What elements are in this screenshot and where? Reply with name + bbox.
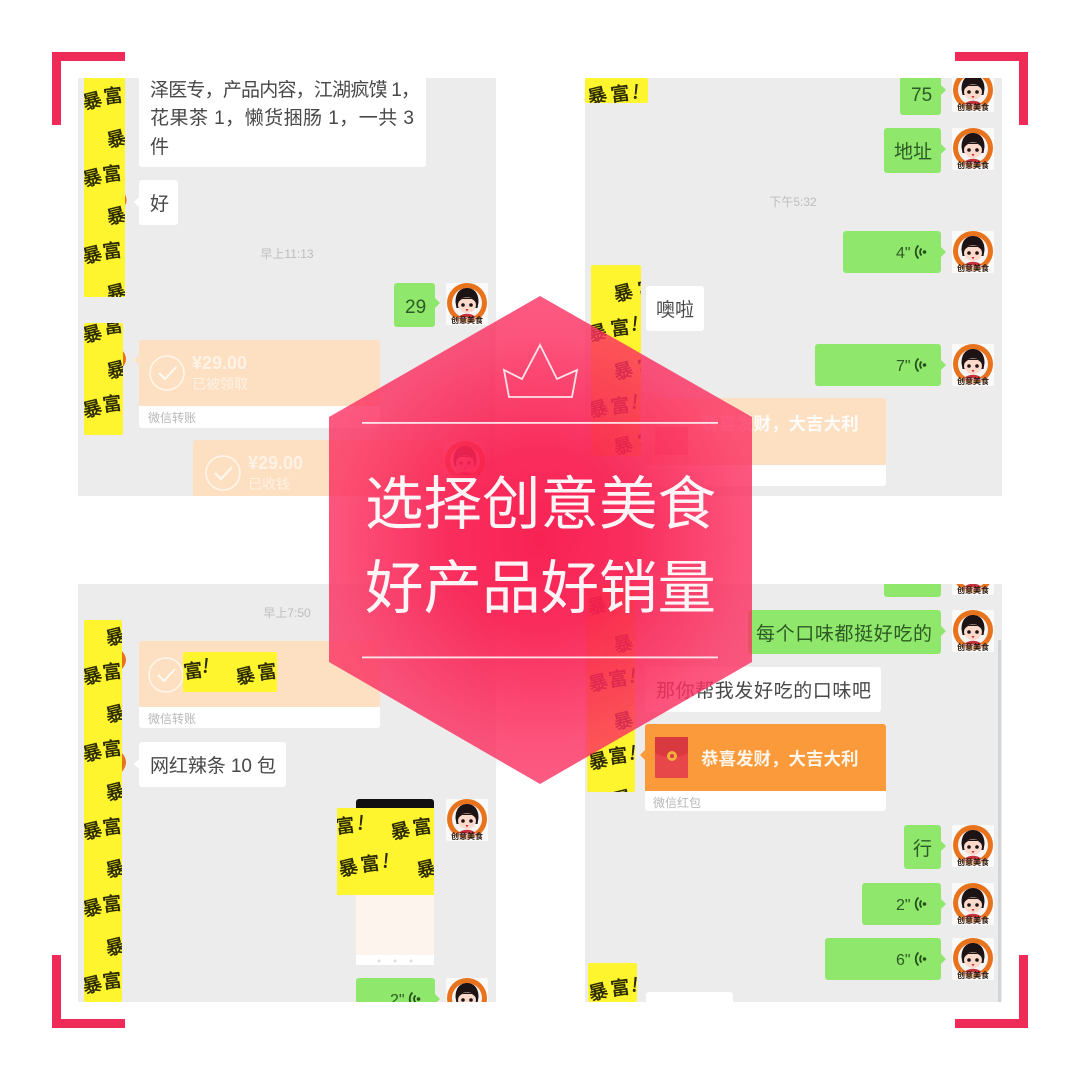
watermark strip: 富 [101,235,123,265]
bubble: order details: 泽医专，产品内容，江湖疯馍 1， [150,79,420,101]
watermark strip [585,584,637,813]
watermark patch on screenshot: 富 [411,811,433,841]
watermark strip: 暴 [103,853,127,883]
watermark strip: 暴 [611,705,635,735]
scrollbar [998,640,1001,1002]
watermark strip: 富 [636,351,658,381]
voice bubble: 4 seconds: 4" [896,245,911,262]
transfer card: collected [193,440,329,496]
voice bubble: 2 seconds [862,883,946,925]
avatar: 创意美食 [957,102,989,113]
bubble: ok: 噢啦 [656,299,694,321]
panel: chat screenshot bottom left [78,584,496,1020]
avatar [446,978,488,1002]
avatar: 创意美食 [957,857,989,868]
bubble: 75: 75 [911,85,932,106]
bubble cut off at bottom [646,992,733,1022]
bubble cut off at top [884,560,941,597]
watermark strip: 暴 [585,317,609,347]
watermark strip: 暴 [80,892,104,922]
watermark patch on transfer card: 富 [256,656,278,686]
avatar [445,441,485,475]
watermark strip: 富 [101,888,123,918]
central hexagon badge [329,296,752,784]
watermark strip: 暴 [80,162,104,192]
watermark strip: 富 [102,310,124,340]
watermark strip: 暴 [586,393,610,423]
bubble: reply: 好 [150,193,169,215]
headline: 选择创意美食 [365,472,716,537]
bubble: spicy strips order: 网红辣条 10 包 [150,755,276,777]
corner bracket: top right [955,56,1024,125]
watermark strip: 暴 [585,80,609,110]
avatar: 创意美食 [957,642,989,653]
watermark strip: 富 [101,158,123,188]
watermark patch on screenshot: ! [357,808,365,836]
voice bubble: 2 seconds: 2" [390,992,405,1009]
transfer card: received: 微信转账 [148,410,196,425]
avatar: 创意美食 [957,915,989,926]
avatar: 创意美食 [451,831,483,842]
avatar: 创意美食 [957,160,989,171]
avatar [446,799,488,842]
red packet card: 恭喜发财，大吉大利 [701,749,858,769]
bubble: amount 29: 29 [405,297,426,318]
corner bracket: bottom left [56,955,125,1024]
watermark strip [591,265,641,456]
avatar: 创意美食 [957,970,989,981]
watermark strip [585,78,648,103]
icon: crown [504,345,577,397]
red packet card [640,724,886,811]
watermark strip [84,323,123,435]
watermark patch on transfer card: 富 [182,655,204,685]
watermark strip: 暴 [586,745,610,775]
voice bubble: 2 seconds: 2" [896,897,911,914]
corner bracket: top left [56,56,125,125]
screenshot seam under badge [491,330,493,496]
watermark strip: 暴 [104,354,128,384]
bubble: 75 [900,78,946,115]
avatar: 创意美食 [451,315,483,326]
bubble: ok [646,286,704,331]
bubble: okay: 行 [913,838,932,860]
avatar [952,883,994,926]
voice bubble: 2 seconds [356,978,440,1002]
red packet card: 微信红包 [653,795,701,810]
watermark patch on screenshot: 暴 [414,853,438,883]
watermark strip: 富 [609,390,631,420]
transfer card: received: ¥29.00 [192,353,247,373]
avatar [952,231,994,274]
watermark patch on screenshot: 暴 [336,852,360,882]
voice bubble: 6 seconds [825,938,946,980]
transfer card: received: 已被领取 [192,376,248,392]
avatar: 创意美食 [957,263,989,274]
avatar [952,344,994,387]
bubble: order details: 件 [150,136,169,158]
watermark strip: 暴 [80,815,104,845]
watermark strip: ! [629,738,637,766]
headline [365,472,716,621]
watermark strip: 暴 [586,976,610,1006]
watermark strip: 富 [101,965,123,995]
watermark strip: 暴 [80,318,104,348]
watermark patch on screenshot: 富 [334,810,356,840]
bubble: order details [139,78,426,167]
bubble: amount 29 [394,283,440,327]
watermark strip: 富 [101,733,123,763]
avatar: 创意美食 [957,376,989,387]
panel: chat screenshot bottom right [585,553,1002,1022]
watermark patch on transfer card: 暴 [233,660,257,690]
bubble: tasty flavours [748,610,946,654]
watermark strip: 富 [636,273,658,303]
watermark strip: 富 [609,312,631,342]
transfer card: received [134,340,380,428]
watermark strip: 暴 [80,239,104,269]
transfer card: collected: ¥29.00 [248,453,303,473]
bubble: send tasty flavours: 那你帮我发好吃的口味吧 [656,680,871,702]
watermark strip: ! [631,970,639,998]
red packet card: opened [645,398,886,486]
watermark strip: 暴 [104,277,128,307]
phone screenshot message [356,799,434,965]
watermark strip: 暴 [80,393,104,423]
watermark strip: 暴 [104,123,128,153]
watermark strip: ! [629,661,637,689]
avatar: 创意美食 [957,585,989,596]
watermark strip: ! [632,77,640,105]
watermark strip [84,78,125,297]
watermark patch on screenshot [334,808,438,895]
watermark strip: 暴 [80,737,104,767]
watermark strip [84,620,122,1002]
watermark patch on transfer card: ! [202,651,210,679]
bubble: address: 地址 [894,141,932,163]
voice bubble: 4 seconds [843,231,946,273]
avatar edge slivers [123,194,126,367]
bubble: okay [904,825,946,869]
watermark strip: 暴 [103,621,127,651]
timestamp: 早上7:50 [263,606,311,620]
bubble: reply [134,180,178,225]
transfer card: collected: 已收钱 [248,476,290,492]
watermark strip: 暴 [80,660,104,690]
avatar [446,283,488,326]
voice bubble: 7 seconds [815,344,946,386]
watermark patch on transfer card [182,651,278,692]
bubble: order details: 花果茶 1，懒货捆肠 1，一共 3 [150,107,414,129]
watermark strip: 暴 [610,783,634,813]
watermark strip: 暴 [103,931,127,961]
divider top [362,422,718,424]
watermark strip: 富 [101,811,123,841]
red packet card: opened: 恭喜发财，大吉大利 [701,414,858,434]
watermark strip: 暴 [80,85,104,115]
watermark strip: 富 [609,78,631,108]
avatar [952,553,994,596]
watermark strip: 暴 [611,628,635,658]
avatar [952,825,994,868]
transfer card [139,641,380,728]
avatar [952,78,994,112]
watermark patch on screenshot: 暴 [388,815,412,845]
watermark patch on screenshot: 富 [359,848,381,878]
voice bubble: 6 seconds: 6" [896,952,911,969]
avatar [952,128,994,171]
watermark strip: 富 [607,740,629,770]
timestamp: 下午5:32 [769,195,817,209]
voice bubble: 7 seconds: 7" [896,358,911,375]
watermark strip: 暴 [103,698,127,728]
watermark strip: 暴 [585,590,609,620]
watermark strip: 富 [101,656,123,686]
watermark strip: 暴 [103,776,127,806]
corner bracket: bottom right [955,955,1024,1024]
divider bottom [362,656,718,658]
watermark strip: ! [631,309,639,337]
transfer card: 微信转账 [148,711,196,726]
bubble: send tasty flavours [645,667,881,712]
bubble: address [884,128,946,173]
panel: chat screenshot top left [78,60,496,506]
panel: chat screenshot top right [585,60,1002,496]
watermark strip: 暴 [80,969,104,999]
avatar edge slivers [122,651,126,772]
bubble: tasty flavours: 每个口味都挺好吃的 [756,623,932,645]
avatar [952,938,994,981]
watermark strip: 暴 [611,277,635,307]
watermark strip: 富 [609,972,631,1002]
watermark strip: 暴 [611,430,635,460]
watermark strip: 富 [101,388,123,418]
timestamp: 早上11:13 [260,247,314,261]
bubble: spicy strips order [134,742,286,787]
watermark strip: 富 [607,663,629,693]
watermark strip: ! [631,387,639,415]
watermark strip: 暴 [104,200,128,230]
headline: 好产品好销量 [365,556,716,621]
watermark strip: 暴 [611,355,635,385]
avatar [952,610,994,653]
watermark patch on screenshot: ! [382,846,390,874]
watermark strip: 富 [636,426,658,456]
watermark strip [586,963,639,1006]
watermark strip: 暴 [586,667,610,697]
watermark strip: 富 [102,80,124,110]
